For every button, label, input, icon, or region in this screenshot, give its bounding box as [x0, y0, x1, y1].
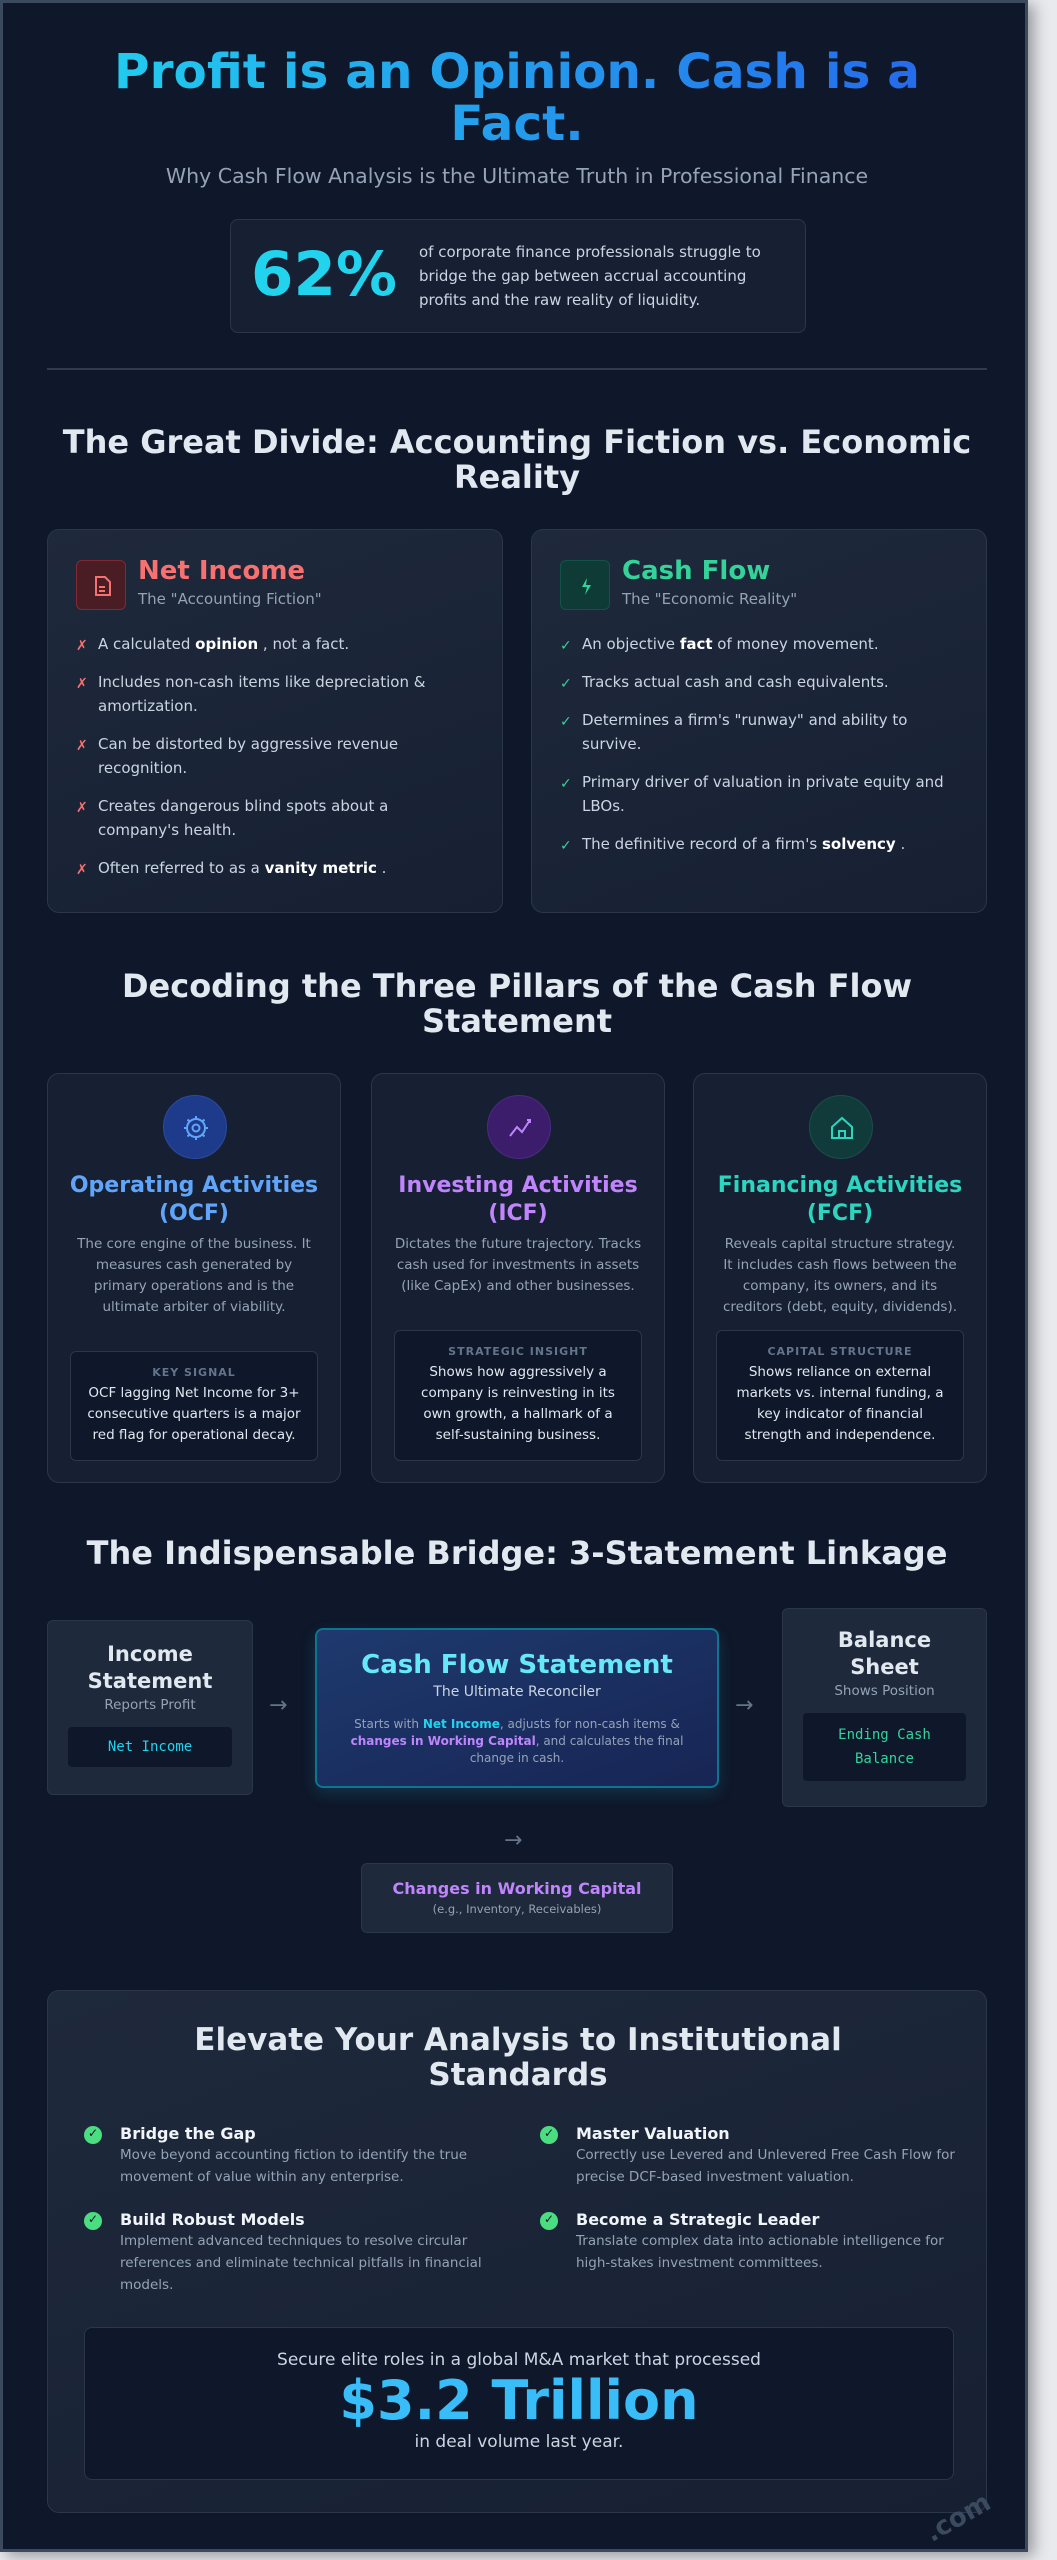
tag: net income: Net Income [108, 1739, 192, 1755]
title: Profit is an Opinion. Cash is a Fact. [114, 44, 920, 152]
list: cash flow points: The definitive record of a firm's solvency . [582, 835, 905, 853]
benefit: strategic leader [540, 2210, 944, 2271]
benefit: master valuation: Master Valuation [576, 2124, 730, 2143]
callout: 3.2 trillion: Secure elite roles in a global M&A market that processed [277, 2350, 761, 2370]
benefit: strategic leader: Become a Strategic Leader [576, 2210, 819, 2229]
list: net income points: ✗ [76, 800, 88, 816]
heading: bridge: The Indispensable Bridge: 3-Statement Linkage [87, 1534, 947, 1572]
panel: financing: Financing Activities (FCF) [718, 1173, 962, 1226]
panel: elevate [47, 1990, 987, 2513]
icon: house [809, 1095, 873, 1159]
list: cash flow points: ✓ [560, 676, 572, 692]
callout: key signal [70, 1351, 318, 1461]
tag: ending cash: Balance [855, 1751, 914, 1767]
box: working capital [361, 1863, 673, 1933]
panel: operating [47, 1073, 341, 1483]
box: balance sheet: Shows Position [834, 1683, 935, 1699]
callout: key signal: OCF lagging Net Income for 3+ consecutive quarters is a major red flag for operational decay. [87, 1385, 301, 1443]
stat text: of corporate finance professionals struggle to bridge the gap between accrual accounting profits and the raw reality of liquidity. [419, 243, 761, 309]
panel: financing: Reveals capital structure strategy. It includes cash flows between the company, its owners, and its creditors (debt, equity, dividends). [723, 1236, 957, 1315]
icon: document [76, 560, 126, 610]
list: net income points: ✗ [76, 676, 88, 692]
tag: net income [68, 1727, 232, 1767]
box: balance sheet: Balance [838, 1628, 931, 1652]
benefit: build robust models [84, 2210, 482, 2293]
callout: strategic insight: Shows how aggressively a company is reinvesting in its own growth, a hallmark of a self-sustaining business. [421, 1364, 615, 1443]
callout: strategic insight: STRATEGIC INSIGHT [448, 1345, 588, 1358]
benefit: strategic leader: Translate complex data into actionable intelligence for high-stakes investment committees. [576, 2233, 944, 2271]
heading: three pillars: Decoding the Three Pillars of the Cash Flow Statement [122, 967, 912, 1040]
list: net income points: ✗ [76, 638, 88, 654]
icon: lightning [560, 560, 610, 610]
box: balance sheet [782, 1608, 987, 1807]
list: net income points: Often referred to as a vanity metric . [98, 859, 386, 877]
stat box: 62% [230, 219, 806, 333]
callout: 3.2 trillion [84, 2327, 954, 2480]
benefit: build robust models: Build Robust Models [120, 2210, 305, 2229]
watermark: .com [920, 2487, 996, 2549]
list: cash flow points: Determines a firm's "runway" and ability to survive. [582, 711, 907, 753]
tag: ending cash: Ending Cash [838, 1727, 931, 1743]
benefit: master valuation [540, 2124, 955, 2185]
panel: financing [693, 1073, 987, 1483]
list: net income points: ✗ [76, 738, 88, 754]
arrow: → [269, 1693, 287, 1718]
subtitle: Why Cash Flow Analysis is the Ultimate Truth in Professional Finance [166, 164, 868, 188]
list: cash flow points [560, 635, 944, 854]
panel: investing: Investing Activities (ICF) [398, 1173, 638, 1226]
list: cash flow points: Tracks actual cash and cash equivalents. [582, 673, 889, 691]
heading: cash flow: Cash Flow [622, 556, 770, 586]
panel: investing [371, 1073, 665, 1483]
icon: trend [487, 1095, 551, 1159]
box: income statement: Statement [88, 1669, 212, 1693]
box: balance sheet: Sheet [850, 1655, 919, 1679]
heading: great divide: The Great Divide: Accounting Fiction vs. Economic Reality [63, 423, 971, 496]
list: cash flow points: ✓ [560, 638, 572, 654]
box: working capital: Changes in Working Capital [392, 1879, 642, 1898]
list: cash flow points: An objective fact of money movement. [582, 635, 879, 653]
benefit: bridge the gap [84, 2124, 467, 2185]
box: cash flow statement: Cash Flow Statement [361, 1650, 673, 1680]
tag: ending cash [803, 1713, 966, 1781]
box: cash flow statement: The Ultimate Reconciler [433, 1684, 601, 1700]
box: income statement: Income [107, 1642, 193, 1666]
box: cash flow statement: Starts with Net Income, adjusts for non-cash items & changes in Working Capital, and calculates the final change in cash. [351, 1717, 683, 1765]
list: net income points: Can be distorted by aggressive revenue recognition. [98, 735, 398, 777]
benefit: build robust models: Implement advanced techniques to resolve circular references and eliminate technical pitfalls in financial models. [120, 2233, 482, 2293]
callout: capital structure [716, 1330, 964, 1461]
list: net income points: Creates dangerous blind spots about a company's health. [98, 797, 388, 839]
panel: cash flow [531, 529, 987, 913]
list: cash flow points: Primary driver of valuation in private equity and LBOs. [582, 773, 944, 815]
heading: net income: Net Income [138, 556, 305, 586]
callout: key signal: KEY SIGNAL [152, 1366, 236, 1379]
box: income statement: Reports Profit [104, 1697, 196, 1713]
list: cash flow points: ✓ [560, 776, 572, 792]
box: cash flow statement [315, 1628, 719, 1788]
list: cash flow points: ✓ [560, 838, 572, 854]
panel: investing: Dictates the future trajectory. Tracks cash used for investments in assets (like CapEx) and other businesses. [395, 1236, 641, 1294]
benefit: bridge the gap: Bridge the Gap [120, 2124, 256, 2143]
panel: net income [47, 529, 503, 913]
callout: capital structure: CAPITAL STRUCTURE [767, 1345, 913, 1358]
panel: cash flow: The "Economic Reality" [622, 590, 797, 608]
list: net income points: ✗ [76, 862, 88, 878]
list: net income points [76, 635, 425, 878]
callout: 3.2 trillion: $3.2 Trillion [339, 2369, 699, 2432]
arrow: → [735, 1693, 753, 1718]
arrow: down: → [504, 1828, 522, 1853]
panel: operating: The core engine of the business. It measures cash generated by primary operations and is the ultimate arbiter of viability. [77, 1236, 311, 1315]
box: income statement [47, 1620, 253, 1795]
callout: strategic insight [394, 1330, 642, 1461]
list: net income points: Includes non-cash items like depreciation & amortization. [98, 673, 425, 715]
callout: 3.2 trillion: in deal volume last year. [415, 2432, 623, 2452]
box: working capital: (e.g., Inventory, Receivables) [433, 1902, 601, 1916]
list: cash flow points: ✓ [560, 714, 572, 730]
callout: capital structure: Shows reliance on external markets vs. internal funding, a key indicator of financial strength and independence. [736, 1364, 944, 1443]
panel: net income: The "Accounting Fiction" [138, 590, 322, 608]
list: net income points: A calculated opinion , not a fact. [98, 635, 349, 653]
heading: elevate: Elevate Your Analysis to Institutional Standards [194, 2022, 842, 2093]
icon: gear [163, 1095, 227, 1159]
benefit: master valuation: Correctly use Levered and Unlevered Free Cash Flow for precise DCF-based investment valuation. [576, 2147, 955, 2185]
benefit: bridge the gap: Move beyond accounting fiction to identify the true movement of value within any enterprise. [120, 2147, 467, 2185]
stat number: 62% [251, 239, 397, 310]
panel: operating: Operating Activities (OCF) [70, 1173, 318, 1226]
